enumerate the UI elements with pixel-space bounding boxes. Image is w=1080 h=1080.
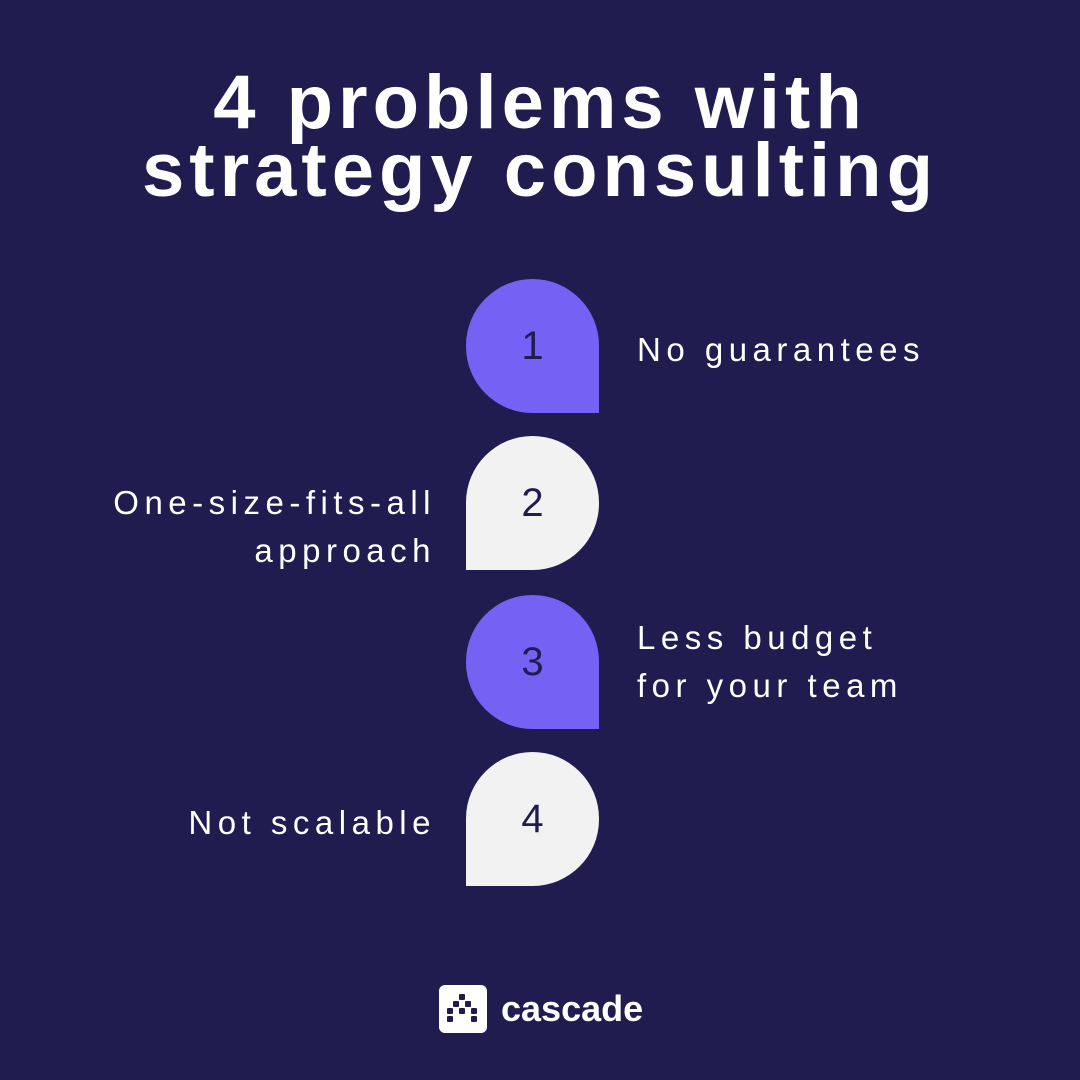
item 4 shape: 4 — [521, 796, 544, 840]
item 4 shape — [466, 752, 599, 886]
item 1 shape — [466, 279, 599, 413]
item 2 label — [113, 484, 436, 569]
title — [142, 60, 938, 213]
title: strategy consulting — [142, 128, 938, 213]
item 1 label: No guarantees — [637, 331, 925, 368]
item 1 shape: 1 — [521, 324, 544, 368]
logo text: cascade — [501, 988, 643, 1029]
item 2 shape: 2 — [521, 480, 544, 524]
item 2 label: approach — [254, 532, 436, 569]
item 3 label: for your team — [637, 667, 903, 704]
item 3 shape — [466, 595, 599, 729]
item 3 shape: 3 — [521, 640, 544, 684]
item 2 label: One-size-fits-all — [113, 484, 436, 521]
icon: cascade logo — [439, 985, 487, 1033]
item 3 label — [637, 619, 903, 704]
item 4 label: Not scalable — [188, 804, 436, 841]
logo — [439, 985, 643, 1033]
title: 4 problems with — [213, 60, 867, 145]
item 3 label: Less budget — [637, 619, 877, 656]
item 2 shape — [466, 436, 599, 570]
